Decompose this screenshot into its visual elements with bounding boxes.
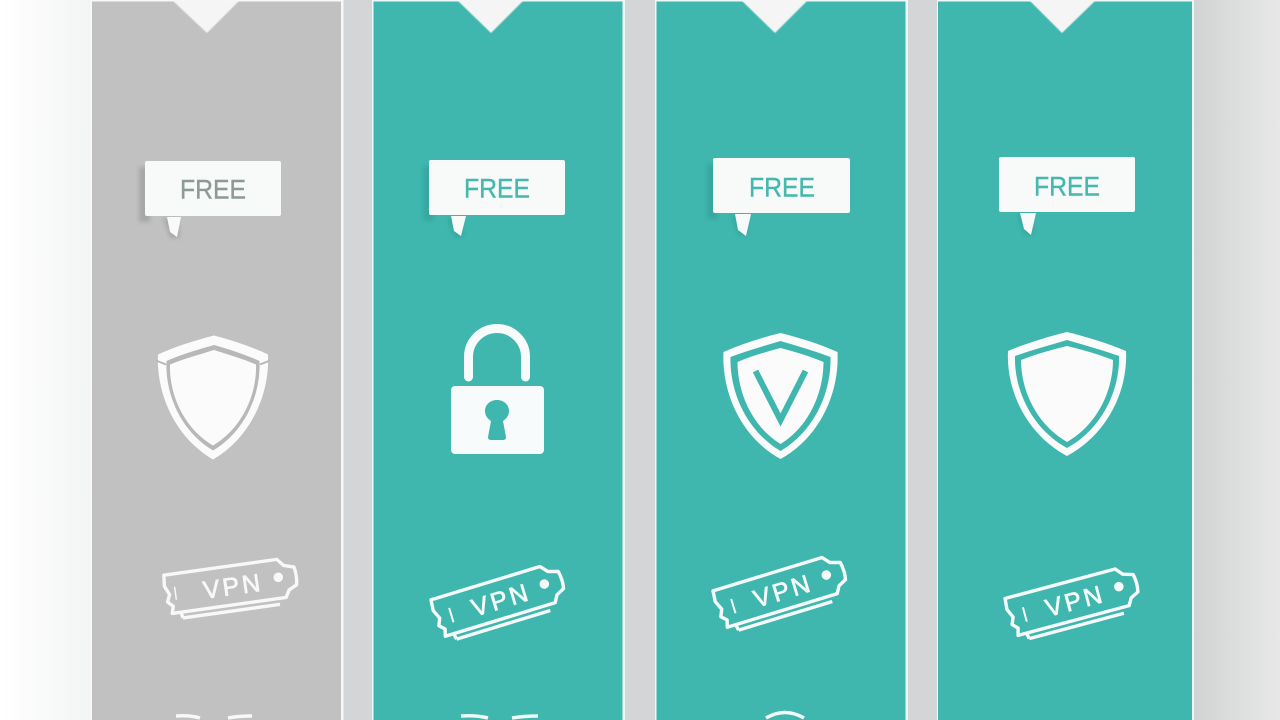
badge: FREE column 4: FREE	[1034, 172, 1100, 202]
shackle	[468, 328, 526, 377]
icon: VPN ticket column 2	[430, 562, 569, 643]
icon: VPN ticket column 4	[1004, 565, 1143, 642]
panel: column 2 teal	[372, 0, 625, 720]
badge: FREE column 3: FREE	[749, 172, 815, 202]
panel: column 4 teal	[937, 0, 1194, 720]
lock body	[451, 386, 544, 454]
icon: cropped arcs column 2	[461, 716, 538, 718]
badge: FREE column 4	[999, 157, 1135, 235]
badge: FREE column 2	[423, 160, 565, 237]
icon: cropped circle column 3	[766, 712, 804, 718]
icon: VPN ticket column 1	[163, 557, 300, 620]
icon: V shield column 3	[723, 333, 838, 459]
notch	[1029, 0, 1096, 33]
icon: padlock column 2	[451, 328, 544, 454]
badge: FREE column 2: FREE	[464, 174, 530, 204]
letter V	[756, 371, 806, 420]
badge: FREE column 1: FREE	[180, 174, 246, 204]
panel: column 3 teal	[655, 0, 908, 720]
icon: VPN ticket column 2: VPN	[468, 578, 534, 623]
icon: shield column 1	[156, 336, 270, 460]
notch	[172, 0, 240, 33]
icon: VPN ticket column 3	[712, 553, 851, 634]
notch	[741, 0, 808, 33]
icon: VPN ticket column 1: VPN	[201, 569, 265, 605]
badge: FREE column 1	[139, 161, 281, 238]
notch	[457, 0, 524, 33]
panel: column 1 grey	[90, 0, 344, 720]
icon: shield column 4	[1008, 332, 1126, 456]
keyhole	[485, 400, 509, 440]
badge: FREE column 3	[707, 158, 850, 236]
icon: VPN ticket column 3: VPN	[750, 569, 816, 614]
icon: cropped arcs column 1	[176, 716, 252, 718]
icon: VPN ticket column 4: VPN	[1042, 580, 1108, 623]
